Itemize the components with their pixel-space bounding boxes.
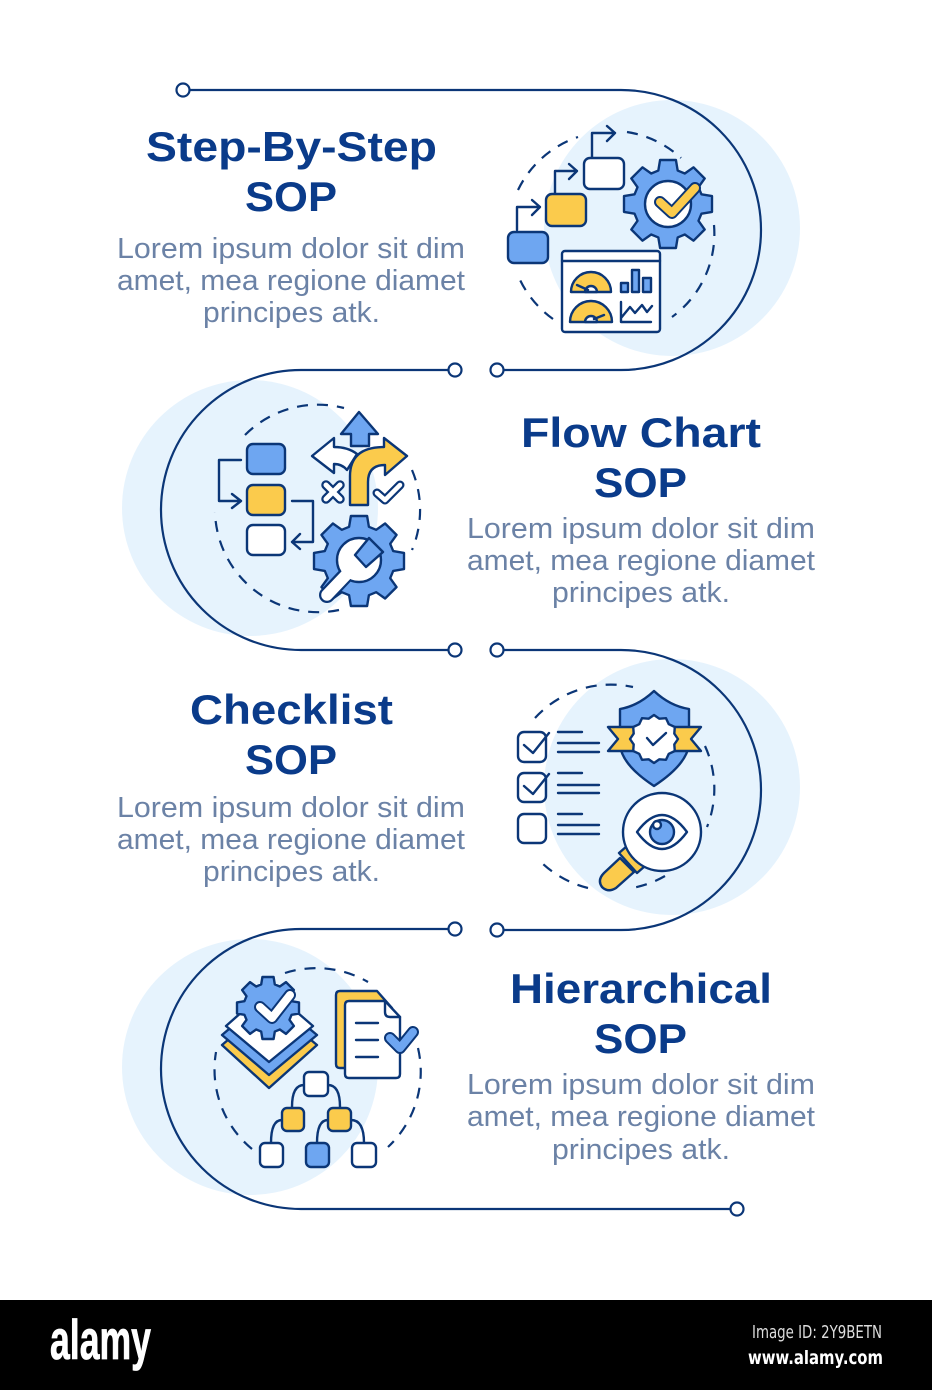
panel: hierarchical SOP <box>122 922 815 1216</box>
text block: Lorem ipsum dolor sit dim <box>117 792 465 824</box>
icon: step boxes with arrows <box>508 126 624 263</box>
text block <box>467 1069 815 1166</box>
dashed ring <box>517 132 714 319</box>
icon: direction arrows <box>312 412 407 505</box>
heading: SOP <box>594 1015 687 1062</box>
connector line <box>161 922 744 1216</box>
dashed ring <box>535 685 714 888</box>
text block: Lorem ipsum dolor sit dim <box>117 233 465 265</box>
text block: amet, mea regione diamet <box>467 545 815 577</box>
connector line <box>490 644 761 936</box>
background circle <box>544 659 800 915</box>
icon: dashboard window <box>562 251 660 332</box>
footer bar <box>0 1300 932 1390</box>
text block: Lorem ipsum dolor sit dim <box>467 513 815 545</box>
panel: flow chart SOP <box>122 364 815 656</box>
panel: step-by-step SOP <box>117 84 800 376</box>
icon: checklist <box>518 732 599 843</box>
footer logo: alamy <box>50 1308 151 1371</box>
background circle <box>122 939 378 1195</box>
background circle <box>122 380 378 636</box>
heading: SOP <box>594 459 687 506</box>
heading <box>521 409 761 506</box>
dashed ring <box>215 968 421 1149</box>
background circle <box>544 100 800 356</box>
text block <box>117 792 465 888</box>
heading <box>510 965 772 1062</box>
heading: Step-By-Step <box>146 123 437 170</box>
image id: Image ID: 2Y9BETN <box>752 1322 882 1343</box>
heading: SOP <box>245 736 337 783</box>
heading: Checklist <box>190 686 393 733</box>
text block: amet, mea regione diamet <box>117 824 465 856</box>
connector line <box>176 84 761 376</box>
heading: SOP <box>245 173 337 220</box>
heading: Hierarchical <box>510 965 772 1012</box>
connector line <box>161 364 462 656</box>
text block: principes atk. <box>552 1134 730 1166</box>
icon: shield with ribbon <box>608 691 701 786</box>
icon: layers with gear <box>222 977 317 1088</box>
text block <box>467 513 815 609</box>
text block: amet, mea regione diamet <box>117 265 465 297</box>
text block: amet, mea regione diamet <box>467 1101 815 1133</box>
heading: Flow Chart <box>521 409 761 456</box>
text block: principes atk. <box>552 577 730 609</box>
dashed ring <box>215 405 420 612</box>
website: www.alamy.com <box>748 1347 883 1369</box>
icon: gear with wrench <box>314 516 404 606</box>
text block: principes atk. <box>203 297 380 329</box>
text block: principes atk. <box>203 856 380 888</box>
icon: documents with check <box>336 991 413 1078</box>
heading <box>146 123 437 220</box>
text block: Lorem ipsum dolor sit dim <box>467 1069 815 1101</box>
panel: checklist SOP <box>117 644 800 936</box>
icon: hierarchy tree <box>260 1072 376 1167</box>
icon: flow boxes <box>219 444 313 555</box>
text block <box>117 233 465 329</box>
icon: gear with check <box>624 160 712 248</box>
heading <box>190 686 393 783</box>
icon: magnifier with eye <box>600 793 701 890</box>
